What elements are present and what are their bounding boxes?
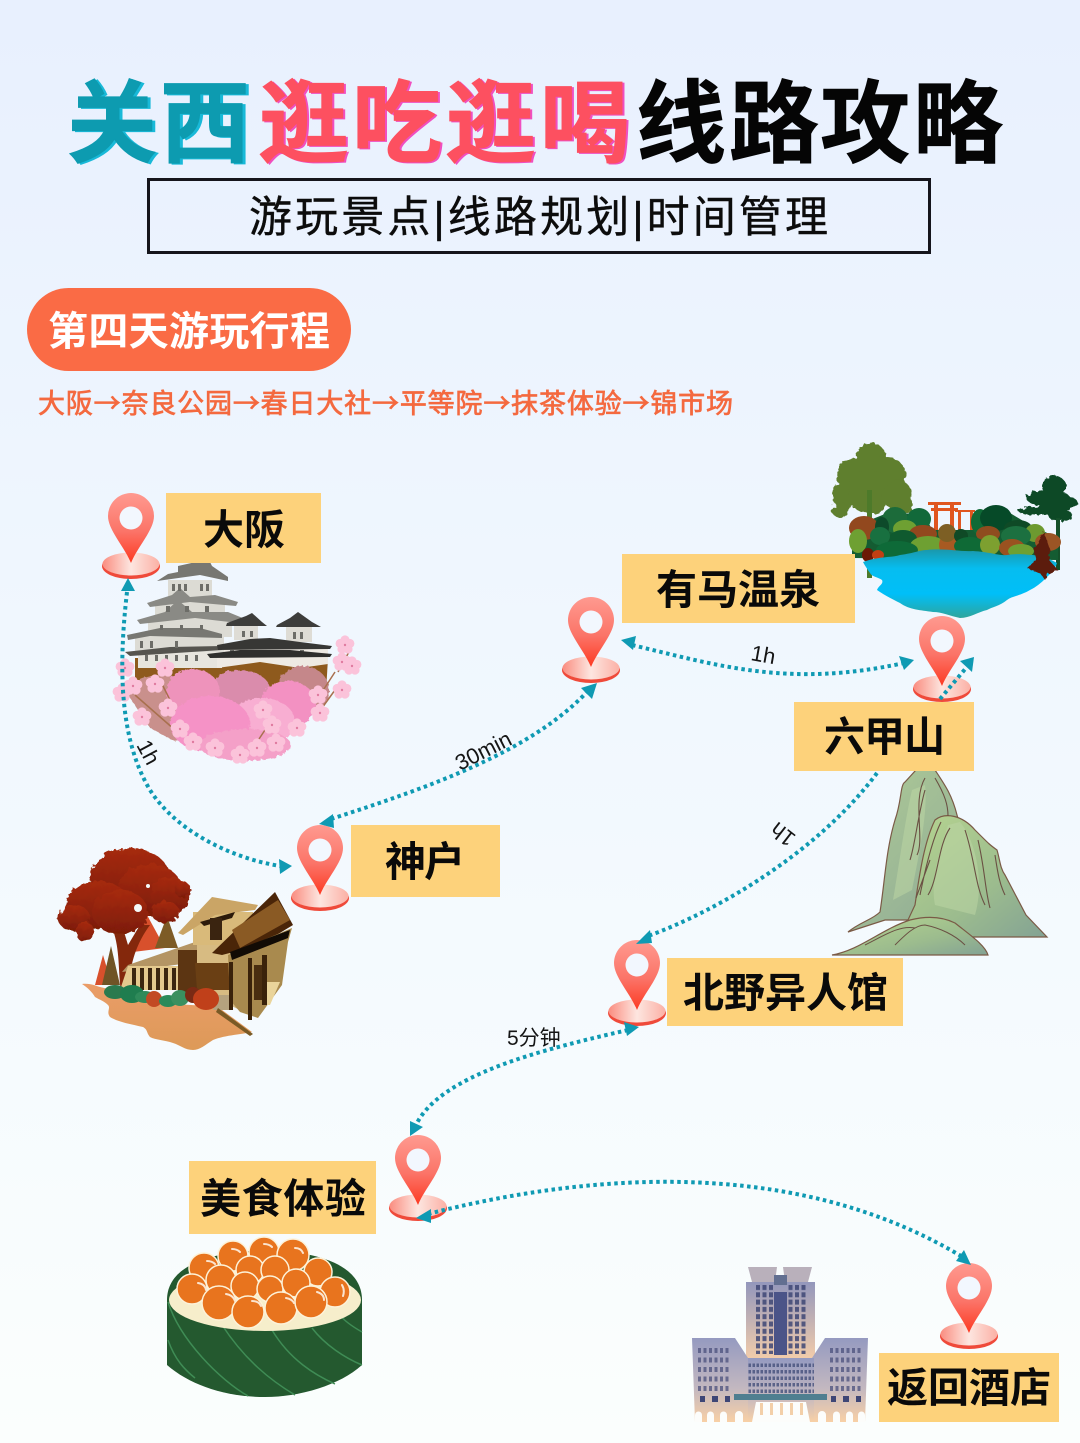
pin: hotel	[940, 1263, 998, 1349]
title: 关西: 关西	[67, 75, 250, 175]
castle side turrets	[207, 612, 332, 658]
arrow: Arima to Rokko	[632, 645, 904, 674]
label: Osaka: 大阪	[203, 507, 285, 553]
pin: Kobe	[291, 825, 349, 911]
label: Kobe	[351, 825, 500, 897]
illustration: Kobe house with red tree	[58, 848, 293, 1050]
illustration: Arima lake with torii	[832, 443, 1078, 618]
label: Kitano	[667, 958, 903, 1026]
time: 5 minutes: 5分钟	[507, 1027, 561, 1050]
hotel arches	[695, 1402, 865, 1422]
salmon roe	[177, 1237, 350, 1328]
arrowheads	[121, 578, 974, 1265]
arrow: Rokko to Kitano	[648, 773, 877, 936]
label: Kobe: 神户	[385, 839, 465, 885]
day pill	[27, 288, 351, 371]
mountain light washes	[893, 785, 979, 915]
castle walls and base	[135, 580, 328, 692]
hotel arcade columns	[760, 1403, 803, 1415]
hotel tower	[746, 1267, 815, 1360]
pin: food	[389, 1135, 447, 1221]
label: Arima Onsen: 有马温泉	[656, 567, 820, 613]
garden shrubs	[104, 985, 219, 1010]
label: back to hotel: 返回酒店	[887, 1365, 1051, 1411]
arrow: Kobe to Arima	[331, 692, 587, 819]
castle keep roofs	[125, 556, 250, 656]
seaweed lines	[168, 1302, 362, 1396]
hill ridge lines	[865, 925, 965, 945]
house upper storey and deck	[178, 892, 293, 1036]
large pine tree	[832, 443, 913, 578]
arrow: food to hotel	[428, 1182, 961, 1256]
time: 1h Rokko-Kitano: 1h	[765, 817, 800, 852]
foreground hill	[832, 917, 988, 955]
ground	[82, 984, 252, 1050]
small firs	[95, 915, 178, 985]
castle windows	[140, 584, 304, 661]
right pine tree	[1018, 476, 1078, 570]
front peak	[900, 816, 1047, 937]
hot spring lake	[863, 549, 1057, 618]
seaweed wrap	[167, 1250, 362, 1397]
pin: Arima	[562, 597, 620, 683]
route summary: 大阪→奈良公园→春日大社→平等院→抹茶体验→锦市场	[38, 382, 733, 421]
house low wing	[120, 942, 205, 1000]
cherry trees	[126, 650, 350, 761]
illustration: hotel	[692, 1267, 868, 1422]
label: food experience	[189, 1161, 376, 1234]
pin: Osaka	[102, 493, 160, 579]
label: Mt Rokko	[794, 702, 974, 771]
subtitle text: 游玩景点|线路规划|时间管理	[249, 194, 828, 242]
arrow: Osaka to Kobe	[122, 592, 280, 866]
arrow: Rokko pin link	[940, 668, 966, 699]
label: Kitano: 北野异人馆	[683, 970, 888, 1016]
torii gate	[928, 502, 975, 532]
rice	[169, 1269, 361, 1331]
place labels	[166, 493, 1059, 1422]
title: 逛吃逛喝: 逛吃逛喝	[259, 75, 630, 175]
back peak	[848, 770, 1000, 932]
label: Arima Onsen	[622, 554, 855, 623]
title: 关西: 关西	[70, 76, 253, 176]
arrow: Kitano to food	[416, 1030, 628, 1125]
time: 1h Osaka-Kobe: 1h	[132, 736, 165, 769]
hotel centre block	[734, 1358, 827, 1422]
bushes	[849, 505, 1061, 562]
ridge lines	[910, 778, 1005, 908]
label: Osaka	[166, 493, 321, 563]
title	[67, 75, 1003, 176]
label: food experience: 美食体验	[200, 1176, 366, 1222]
title: 线路攻略: 线路攻略	[636, 75, 1003, 175]
illustration: ikura gunkan sushi	[167, 1237, 362, 1397]
location pins	[102, 493, 998, 1349]
hotel wings	[692, 1338, 868, 1422]
illustration: Osaka castle with cherry blossoms	[113, 556, 361, 764]
label: back to hotel	[879, 1353, 1059, 1422]
label: Mt Rokko: 六甲山	[824, 714, 945, 760]
roe highlights	[198, 1244, 344, 1306]
subtitle box	[148, 180, 930, 252]
small red fir	[1027, 532, 1058, 580]
time: 1h Arima-Rokko: 1h	[749, 640, 778, 669]
pin: Rokko	[913, 616, 971, 702]
pill text: 第四天游玩行程	[48, 310, 330, 354]
title: 逛吃逛喝: 逛吃逛喝	[261, 76, 632, 176]
route arrows	[122, 592, 966, 1256]
illustration: Rokko mountains	[832, 770, 1047, 955]
red tree	[58, 848, 191, 992]
route time labels	[132, 640, 800, 1050]
pin: Kitano	[608, 940, 666, 1026]
time: 30min: 30min	[451, 726, 516, 775]
cherry blossoms	[113, 635, 361, 764]
